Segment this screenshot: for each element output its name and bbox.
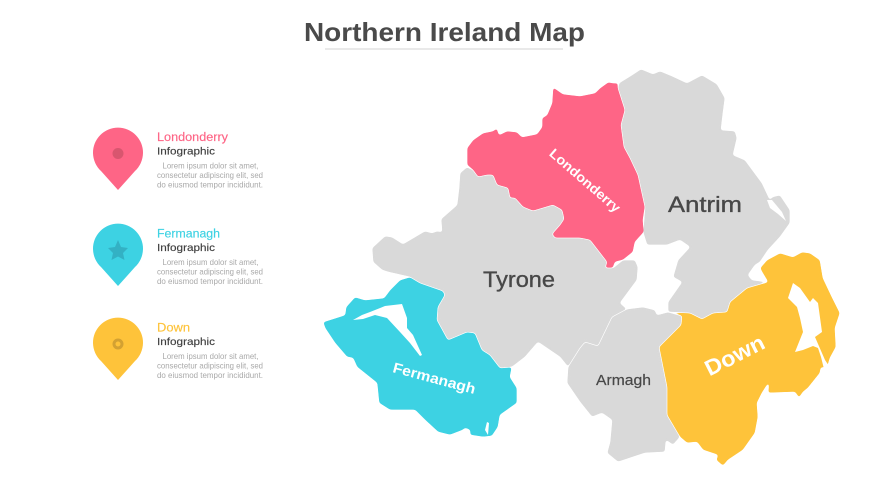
region: Fermanagh xyxy=(323,277,517,437)
region: Tyrone xyxy=(372,167,638,368)
label: Tyrone: Tyrone xyxy=(483,267,555,292)
legend heading: Londonderry xyxy=(157,132,228,144)
map of Northern Ireland xyxy=(323,69,840,466)
region: Antrim xyxy=(618,69,790,319)
title: Northern Ireland Map xyxy=(304,17,585,47)
legend: Fermanagh xyxy=(93,224,263,286)
region: Armagh xyxy=(567,307,682,462)
legend subheading: Infographic xyxy=(157,242,215,254)
legend body text: Lorem ipsum dolor sit amet, xyxy=(162,351,258,361)
label: Armagh: Armagh xyxy=(596,373,651,389)
legend body text: consectetur adipiscing elit, sed xyxy=(157,360,263,370)
label: Antrim: Antrim xyxy=(668,192,742,217)
icon: yellow pin xyxy=(93,318,143,380)
legend heading: Down xyxy=(157,322,190,334)
label: Down: Down xyxy=(700,330,769,381)
region: Down xyxy=(659,252,840,466)
icon: pink pin xyxy=(93,128,143,190)
legend subheading: Infographic xyxy=(157,336,215,348)
legend body text xyxy=(157,257,263,286)
icon: cyan pin xyxy=(93,224,143,286)
legend body text xyxy=(157,351,263,380)
legend heading: Fermanagh xyxy=(157,228,220,240)
legend body text: do eiusmod tempor incididunt. xyxy=(157,370,263,380)
region: Londonderry xyxy=(467,82,645,268)
legend body text: consectetur adipiscing elit, sed xyxy=(157,266,263,276)
label: Londonderry: Londonderry xyxy=(546,146,624,216)
label: Fermanagh: Fermanagh xyxy=(391,360,477,398)
legend body text xyxy=(157,160,263,190)
legend body text: Lorem ipsum dolor sit amet, xyxy=(162,160,258,170)
legend body text: consectetur adipiscing elit, sed xyxy=(157,170,263,180)
legend body text: do eiusmod tempor incididunt. xyxy=(157,180,263,190)
legend body text: do eiusmod tempor incididunt. xyxy=(157,276,263,286)
legend: Down xyxy=(93,318,263,380)
legend subheading: Infographic xyxy=(157,146,215,158)
legend: Londonderry xyxy=(93,128,263,190)
legend body text: Lorem ipsum dolor sit amet, xyxy=(162,257,258,267)
